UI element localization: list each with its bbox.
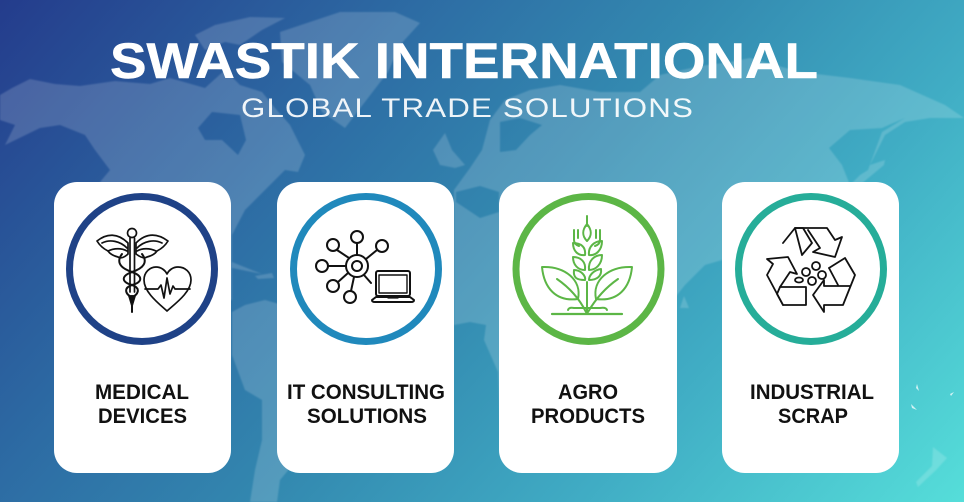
icon: wheat plant	[542, 216, 632, 314]
label: industrial scrap: INDUSTRIAL	[750, 381, 874, 404]
label: medical devices	[95, 381, 189, 428]
icon: recycling	[767, 228, 855, 312]
greenland	[280, 12, 420, 128]
highlights	[911, 384, 954, 410]
ring: scrap	[738, 196, 884, 342]
ring: it	[294, 196, 438, 342]
label: it consulting solutions: IT CONSULTING	[287, 381, 445, 404]
panel: medical devices	[54, 182, 231, 473]
title: SWASTIK INTERNATIONAL	[110, 33, 818, 89]
label: it consulting solutions	[287, 381, 445, 428]
label: medical devices: MEDICAL	[95, 381, 189, 404]
panel: agro products	[499, 182, 677, 473]
label: agro products	[531, 381, 645, 428]
arctic islands	[195, 17, 285, 50]
label: it consulting solutions: SOLUTIONS	[307, 405, 427, 428]
panel: it consulting	[277, 182, 454, 473]
subtitle: GLOBAL TRADE SOLUTIONS	[241, 93, 694, 123]
british isles	[433, 133, 465, 168]
ring: medical	[70, 196, 214, 342]
new zealand	[916, 447, 947, 487]
caribbean	[232, 262, 262, 274]
sri lanka	[680, 296, 689, 308]
south america	[232, 300, 345, 502]
eurasia and north africa	[454, 58, 964, 420]
label: medical devices: DEVICES	[98, 405, 187, 428]
icon: caduceus and heart	[97, 228, 191, 312]
icon: network and laptop	[316, 231, 414, 303]
label: industrial scrap: SCRAP	[778, 405, 848, 428]
panel: industrial scrap	[722, 182, 899, 473]
label: agro products: AGRO	[558, 381, 618, 404]
label: industrial scrap	[750, 381, 874, 428]
ring: agro	[516, 196, 661, 342]
label: agro products: PRODUCTS	[531, 405, 645, 428]
north america	[0, 70, 305, 300]
